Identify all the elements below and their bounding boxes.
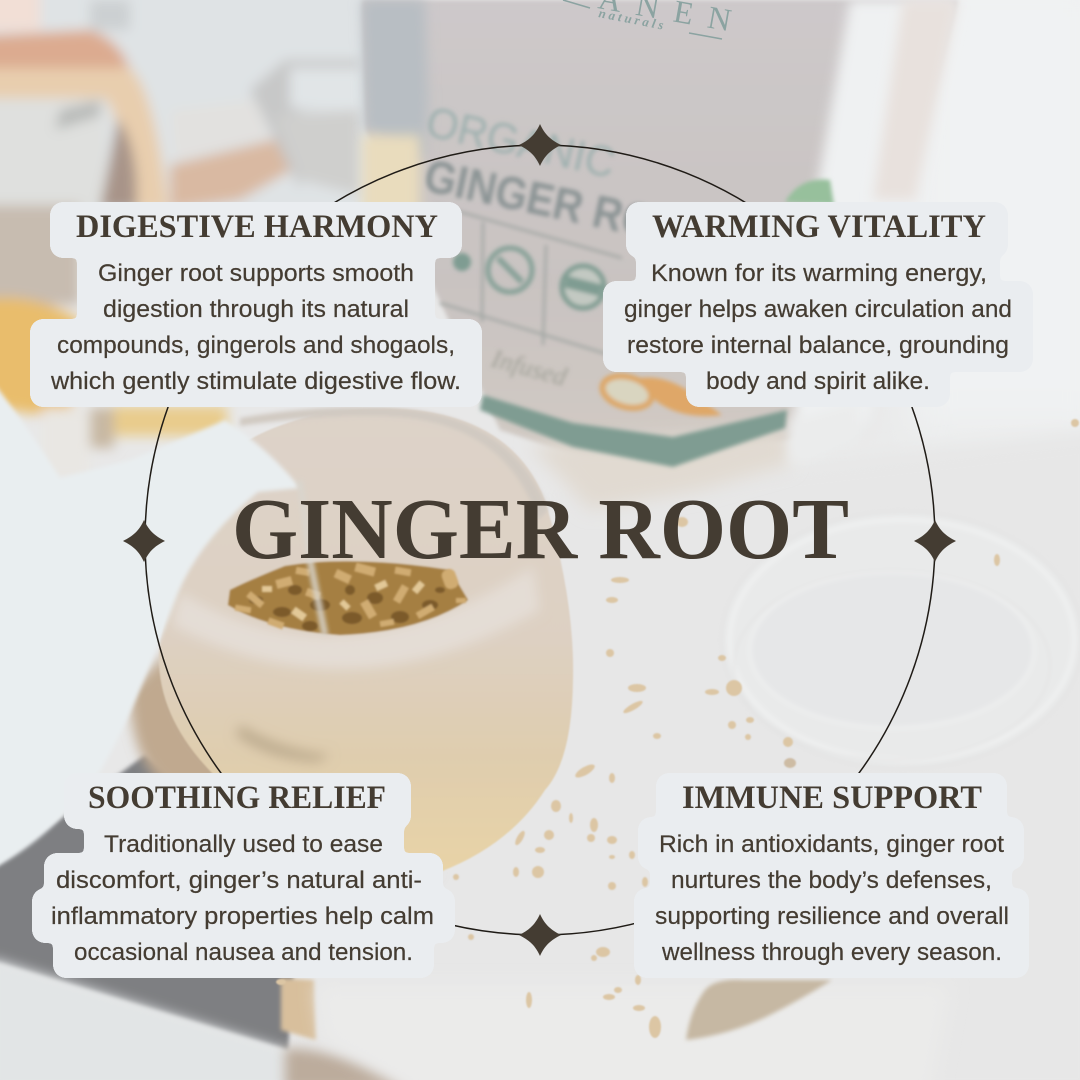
text: digestive harmony body: Ginger root supports smooth <box>98 260 414 287</box>
text: soothing relief body: occasional nausea and tension. <box>74 939 413 966</box>
text: digestive harmony body <box>50 260 461 395</box>
dark tray and foreground marble <box>0 755 950 1080</box>
text: immune support body: wellness through every season. <box>661 939 1002 966</box>
panel: digestive harmony <box>30 202 482 407</box>
text: warming vitality body: Known for its warming energy, <box>651 260 987 287</box>
milk pitcher <box>0 378 300 870</box>
bag: ORGANIC <box>422 98 620 188</box>
star: top <box>519 124 561 166</box>
heading: digestive harmony: DIGESTIVE HARMONY <box>76 209 438 245</box>
bag: naturals <box>597 5 668 33</box>
glass of ginger tea <box>130 407 573 875</box>
text: digestive harmony body: which gently stimulate digestive flow. <box>50 368 461 395</box>
bag: Infused <box>487 344 571 392</box>
title: GINGER ROOT <box>232 480 849 577</box>
text: soothing relief body: discomfort, ginger’s natural anti- <box>56 867 422 894</box>
pouring stream <box>300 480 325 635</box>
top-left blurred furniture <box>0 0 380 478</box>
text: warming vitality body <box>624 260 1012 395</box>
bag: GINGER ROOT <box>420 149 714 260</box>
text: immune support body: nurtures the body’s defenses, <box>671 867 992 894</box>
text: soothing relief body: inflammatory properties help calm <box>51 903 434 930</box>
text: warming vitality body: restore internal balance, grounding <box>627 332 1009 359</box>
heading: soothing relief: SOOTHING RELIEF <box>88 780 386 816</box>
panel: immune support <box>634 773 1029 978</box>
text: digestive harmony body: digestion through its natural <box>103 296 409 323</box>
heading: immune support: IMMUNE SUPPORT <box>682 780 982 816</box>
text: immune support body <box>655 831 1009 966</box>
star: left <box>123 520 165 562</box>
text: warming vitality body: body and spirit alike. <box>706 368 930 395</box>
panel: soothing relief <box>32 773 455 978</box>
text: soothing relief body: Traditionally used to ease <box>104 831 383 858</box>
heading: warming vitality: WARMING VITALITY <box>652 209 986 245</box>
panel: warming vitality <box>603 202 1033 407</box>
text: digestive harmony body: compounds, gingerols and shogaols, <box>57 332 455 359</box>
circular ring <box>145 145 935 935</box>
bag <box>362 0 958 510</box>
text: immune support body: Rich in antioxidants, ginger root <box>659 831 1004 858</box>
star: bottom <box>519 914 561 956</box>
table <box>290 430 1080 1080</box>
glass bowl <box>722 512 1080 768</box>
text: soothing relief body <box>51 831 434 966</box>
ginger root and crumbs <box>276 419 1079 1040</box>
text: warming vitality body: ginger helps awaken circulation and <box>624 296 1012 323</box>
star: right <box>914 520 956 562</box>
text: immune support body: supporting resilience and overall <box>655 903 1009 930</box>
